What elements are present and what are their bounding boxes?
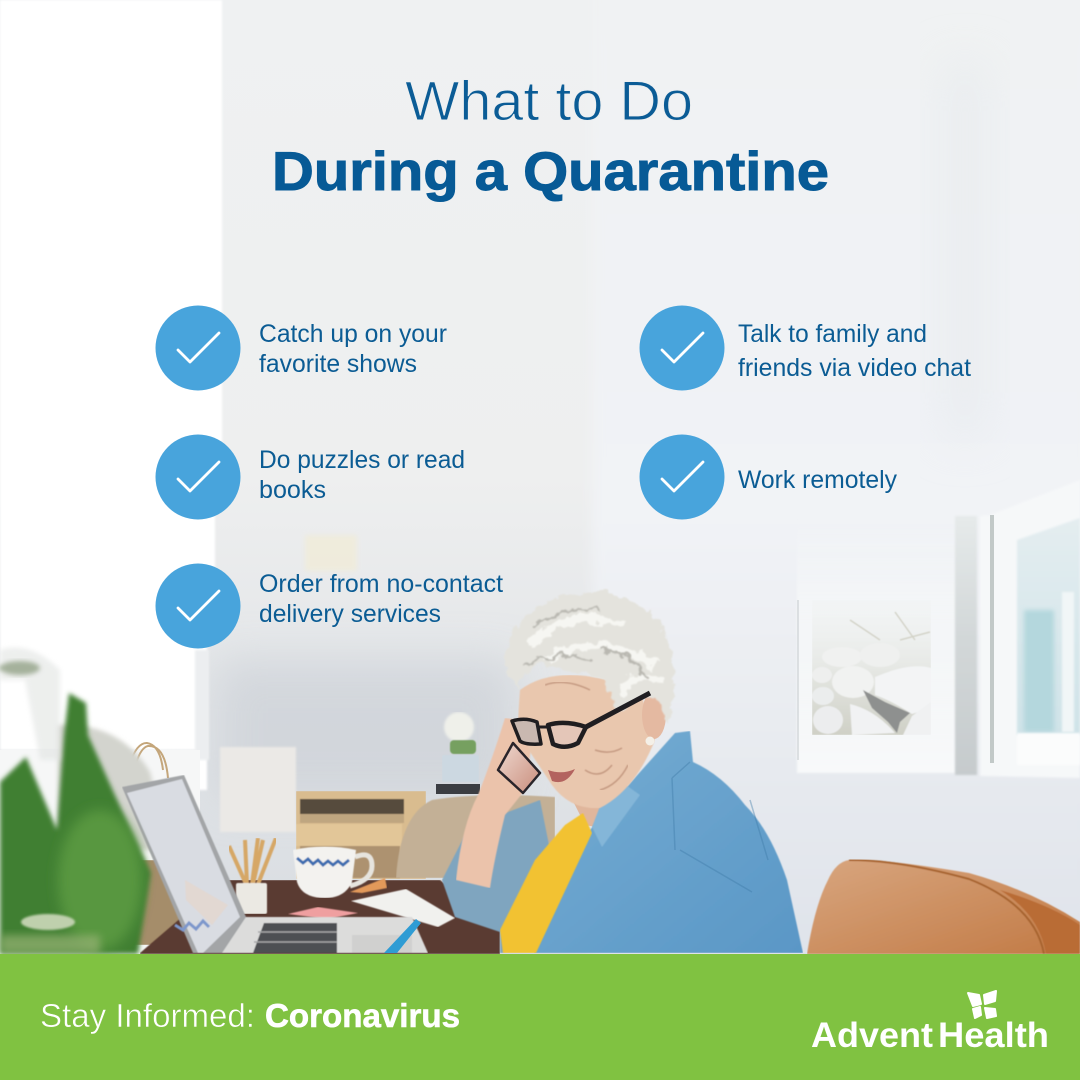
shelf (296, 791, 426, 879)
bright window at left (0, 0, 222, 790)
neck (570, 770, 612, 830)
logo wordmark: Advent (811, 1016, 933, 1055)
sticky note (288, 907, 358, 919)
pencil cup (229, 838, 276, 914)
grey chair shape (58, 725, 170, 850)
item text: Do puzzles or read (259, 446, 465, 474)
woman on phone (442, 591, 803, 953)
checklist item: video chat (640, 306, 971, 390)
checklist item: delivery (156, 564, 503, 648)
mouth (548, 769, 575, 782)
item text: Catch up on your (259, 320, 447, 348)
shopping bag (130, 860, 198, 945)
icon: check circle (640, 306, 724, 390)
footer band (0, 954, 1080, 1080)
footer label: Stay Informed: (40, 997, 255, 1034)
coffee mug (293, 846, 387, 898)
item text: books (259, 476, 326, 504)
title line two: During a Quarantine (272, 140, 829, 202)
item text: Work remotely (738, 466, 897, 494)
laptop (122, 775, 428, 953)
small dark screen (436, 784, 480, 794)
icon: flower (968, 991, 996, 1018)
wall corner shading (940, 60, 990, 440)
item text: friends via video chat (738, 354, 971, 382)
item text: Talk to family and (738, 320, 927, 348)
right wall (592, 0, 1080, 960)
title (272, 69, 829, 202)
icon: check circle (156, 564, 240, 648)
footer label: Coronavirus (265, 997, 460, 1034)
item text: Order from no-contact (259, 570, 503, 598)
hair shadows (525, 609, 650, 680)
stone picture (812, 600, 931, 735)
wall haze (215, 660, 515, 800)
icon: check circle (156, 306, 240, 390)
desk (140, 880, 500, 954)
white binders (220, 747, 296, 832)
footer background (0, 954, 1080, 1080)
orange leather chair (807, 860, 1080, 954)
flowers on shelf (442, 712, 479, 782)
logo wordmark: Health (938, 1016, 1049, 1055)
logo: AdventHealth (811, 991, 1049, 1055)
shirt sleeve cuff (442, 800, 560, 953)
beige chair (396, 795, 555, 878)
ear (642, 691, 666, 739)
hair highlights (530, 618, 662, 695)
icon: check circle (156, 434, 240, 520)
window mullion (195, 650, 209, 760)
checklist item: work remotely (640, 434, 897, 520)
earring (646, 736, 654, 746)
yellow blouse (500, 813, 592, 953)
title line one: What to Do (405, 69, 693, 132)
faint fogged object (305, 535, 357, 571)
lower left window glass (0, 750, 200, 954)
face (518, 675, 655, 808)
item text: favorite shows (259, 350, 417, 378)
shopping bag handles (124, 743, 168, 785)
checklist item: shows (156, 306, 447, 390)
glasses (512, 693, 650, 747)
blurred plant leaves (0, 648, 151, 954)
face wrinkles (545, 682, 628, 790)
white hair (506, 591, 673, 725)
collar (592, 775, 640, 847)
art frame two (980, 480, 1080, 778)
item text: delivery services (259, 600, 441, 628)
icon: check circle (640, 434, 724, 520)
blue denim shirt (534, 731, 803, 953)
checklist item: puzzles (156, 434, 465, 520)
footer label (40, 997, 460, 1034)
shirt fold (672, 762, 768, 892)
blue pen (384, 919, 421, 953)
art frame one (797, 516, 977, 775)
forearm (456, 718, 535, 888)
phone (498, 743, 540, 793)
notebook (351, 889, 455, 927)
